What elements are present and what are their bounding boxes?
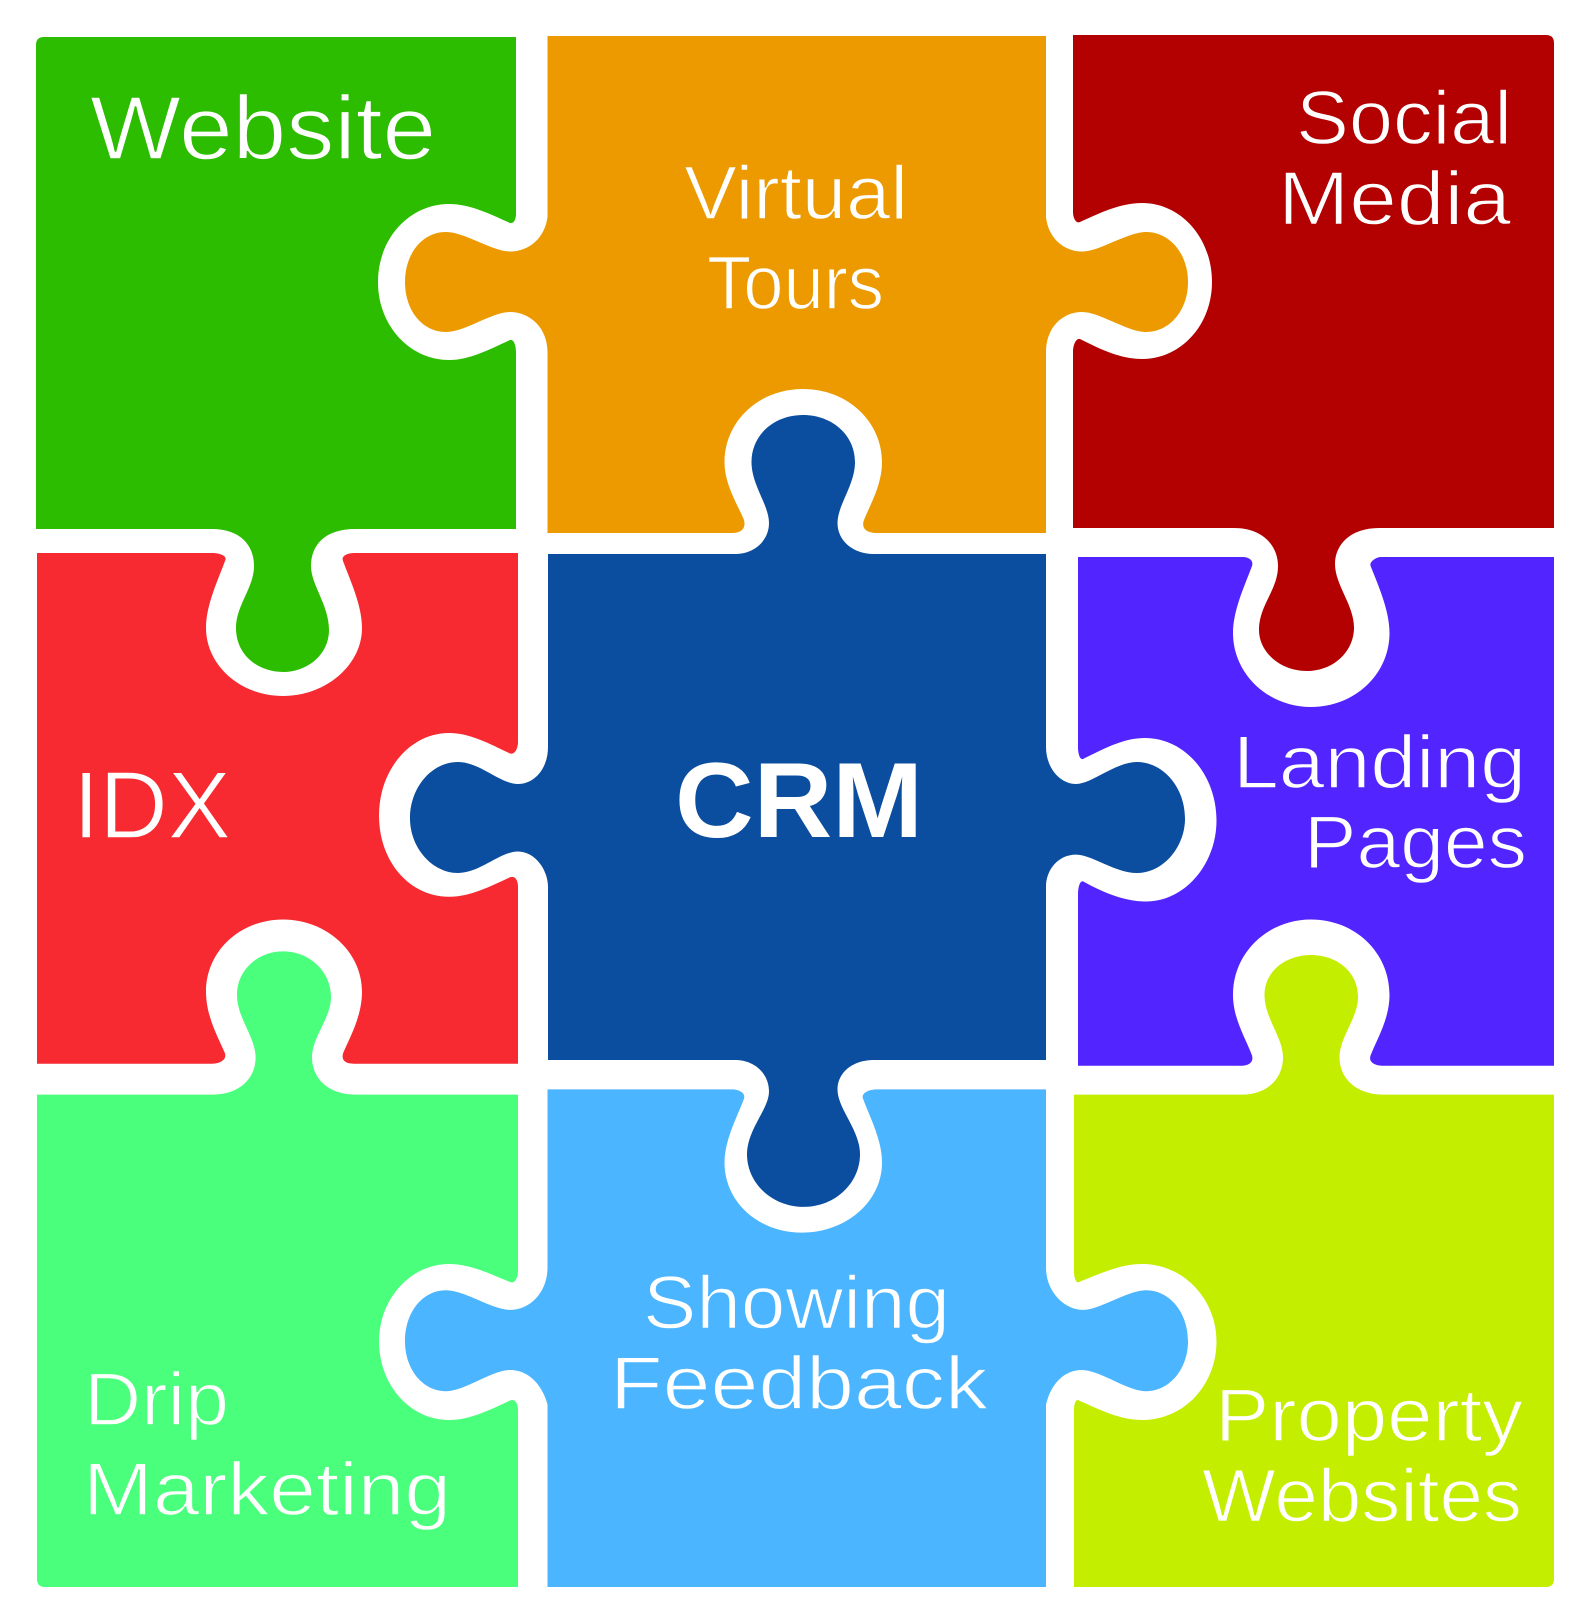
label: Landing Pages — [1233, 720, 1527, 884]
panel: IDX — [37, 553, 518, 1064]
label: Social Media: Social — [1296, 76, 1512, 161]
label: Virtual Tours — [684, 151, 908, 326]
label: Drip Marketing: Drip — [84, 1357, 229, 1441]
label: Landing Pages: Landing — [1233, 720, 1526, 804]
label: Property Websites — [1202, 1373, 1524, 1538]
label: Landing Pages: Pages — [1304, 800, 1527, 884]
panel: Virtual Tours — [405, 36, 1188, 533]
label: Social Media — [1278, 76, 1512, 242]
label: Website: Website — [90, 79, 436, 179]
label: Showing Feedback: Showing — [643, 1260, 950, 1344]
label: Showing Feedback — [610, 1260, 989, 1425]
label: CRM: CRM — [675, 740, 923, 860]
label: IDX: IDX — [73, 752, 231, 859]
label: Property Websites: Property — [1215, 1373, 1524, 1457]
label: Virtual Tours: Tours — [707, 241, 884, 326]
panel: CRM — [410, 415, 1185, 1207]
panel: Website — [36, 37, 516, 672]
label: Showing Feedback: Feedback — [610, 1341, 989, 1425]
label: Social Media: Media — [1278, 156, 1512, 242]
panel: Landing Pages — [1078, 557, 1554, 1066]
panel: Social Media — [1073, 35, 1554, 671]
label: Property Websites: Websites — [1202, 1454, 1522, 1538]
panel: Showing Feedback — [405, 1089, 1188, 1587]
panel: Drip Marketing — [37, 951, 518, 1587]
label: Virtual Tours: Virtual — [684, 151, 908, 236]
label: Drip Marketing — [83, 1357, 451, 1531]
label: Drip Marketing: Marketing — [83, 1447, 451, 1531]
panel: Property Websites — [1074, 955, 1554, 1587]
